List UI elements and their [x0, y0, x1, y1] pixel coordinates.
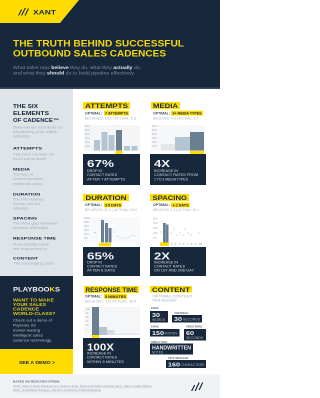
bar chart: media: 50%	[152, 133, 158, 136]
heading: MEDIA	[153, 103, 178, 110]
element: duration: The time between	[13, 197, 44, 201]
element: media	[13, 166, 43, 186]
stat box: 100X	[87, 342, 114, 354]
stat box	[150, 154, 206, 185]
bar chart: attempts: 10%	[85, 145, 91, 148]
footer	[0, 374, 220, 398]
bar chart: duration: 40%	[84, 229, 90, 232]
optimal value: OPTIMAL:	[153, 111, 170, 115]
bar chart: attempts: 30%	[85, 141, 91, 144]
button: see a demo: SEE A DEMO >	[19, 360, 55, 366]
box: direct mail handwritten notes	[150, 340, 193, 354]
bar chart: attempts: 80%	[85, 125, 91, 128]
optimal value	[85, 111, 129, 116]
bar chart: media: 40%	[152, 137, 158, 140]
header banner	[0, 0, 220, 89]
bar chart: spacing: 7	[187, 243, 189, 246]
bar chart: duration: 60%	[84, 225, 90, 228]
stat box: AFTER 8 DAYS	[87, 268, 116, 272]
optimal value: OPTIMAL:	[85, 111, 102, 115]
subtitle: What sales reps believe they do, what they actually do,	[13, 65, 141, 70]
bar chart: response time: 20	[86, 325, 89, 327]
sources	[13, 380, 153, 392]
element: attempts	[13, 146, 54, 161]
optimal value: 3-5 DAYS	[105, 203, 122, 207]
title: THE TRUTH BEHIND SUCCESSFUL	[13, 38, 185, 48]
stat box: 2X	[154, 250, 170, 262]
stat box	[83, 338, 140, 368]
stat box: INCREASE IN	[154, 260, 178, 264]
element: spacing	[13, 216, 57, 230]
sidebar heading	[13, 104, 59, 124]
box: text message 160 characters: TEXT MESSAGE	[168, 356, 189, 360]
stat box: INCREASE IN	[154, 169, 178, 173]
box: video email 60 seconds: VIDEO EMAIL	[186, 324, 203, 328]
box: video email 60 seconds	[184, 324, 206, 340]
promo text: Playbooks, the	[13, 322, 36, 328]
promo text: market-leading	[13, 328, 40, 332]
bar chart: media: 10%	[152, 145, 158, 148]
logo: XANT	[33, 10, 56, 17]
element: duration: DURATION	[13, 192, 40, 196]
sidebar intro	[13, 125, 64, 138]
sidebar intro: activities.	[13, 134, 32, 138]
panel: response time	[83, 286, 140, 368]
optimal value: 3+ MEDIA TYPES	[172, 112, 202, 116]
promo text: cadence technology.	[13, 338, 52, 342]
bar chart: spacing: 60%	[153, 222, 159, 225]
element: response time: RESPONSE TIME	[13, 236, 57, 240]
bar chart: response time: 40	[86, 321, 89, 323]
box: email 150 words	[150, 324, 180, 337]
element: content: The messaging used	[13, 262, 54, 266]
box: direct mail handwritten notes: NOTES	[152, 350, 163, 354]
bar chart: media	[151, 125, 205, 154]
box: video email 60 seconds: 60	[186, 331, 194, 337]
element: attempts: ATTEMPTS	[13, 146, 43, 150]
bar chart: spacing: 0%	[153, 237, 157, 240]
element: media: communication	[13, 177, 43, 181]
stat box: 67%	[87, 158, 115, 170]
bar chart: spacing: 8	[191, 243, 193, 246]
believed vs actual: BELIEVED: 24 | ACTUAL: 38.4	[85, 299, 136, 303]
promo text: intelligent sales	[13, 332, 43, 338]
optimal value	[153, 202, 190, 207]
promo text	[13, 318, 53, 342]
bar chart: duration: 0%	[84, 237, 88, 240]
playbooks logo: PLAYBOO KS	[13, 286, 60, 294]
box: direct mail handwritten notes: DIRECT MAIL	[151, 340, 168, 344]
box: email 30 words: EMAIL	[151, 306, 159, 310]
stat box: CONTACT RATES	[87, 173, 118, 177]
sidebar intro: structuring your sales	[13, 130, 57, 134]
bar chart: spacing: 9	[195, 243, 197, 246]
sidebar intro: Data-driven elements for	[13, 125, 64, 129]
element: spacing: The time gap between	[13, 222, 57, 226]
stat box: DROP IN	[87, 260, 102, 264]
box: text message 160 characters: 160	[168, 362, 180, 368]
title: OUTBOUND SALES CADENCES	[13, 48, 166, 58]
bar chart: spacing	[153, 218, 202, 246]
stat box: CONTACT RATES	[87, 356, 118, 360]
element: duration: the first and last	[13, 202, 41, 206]
stat box: CONTACT RATES	[87, 264, 118, 268]
bar chart: duration: 20%	[84, 233, 90, 236]
optimal value: OPTIMAL:	[153, 203, 170, 207]
box: email 30 words	[150, 306, 168, 322]
subtitle	[13, 65, 141, 76]
button: see a demo	[0, 349, 73, 374]
panel: media	[150, 102, 206, 185]
bar chart: duration: 100%	[84, 217, 91, 220]
heading: ATTEMPTS	[85, 103, 129, 110]
bar chart: spacing: 40%	[153, 227, 159, 230]
stat box: 4X	[154, 158, 170, 170]
bar chart: spacing: 20%	[153, 232, 159, 235]
box: email 30 words: WORDS	[152, 318, 165, 322]
bar chart: response time: 80	[86, 313, 89, 315]
bar chart: response time: 100	[86, 309, 91, 311]
bar chart: response time: 60	[86, 317, 89, 319]
element: content: CONTENT	[13, 256, 39, 260]
believed vs actual: BELIEVED: 15.1 | ACTUAL: 5.5	[85, 116, 136, 120]
bar chart: spacing: 10	[199, 243, 202, 246]
bar chart: media: 60%	[152, 129, 158, 132]
stat box: AFTER 7 ATTEMPTS	[87, 177, 126, 181]
promo heading: CADENCE	[13, 306, 39, 311]
promo heading: YOUR SALES	[13, 302, 46, 307]
element: duration	[13, 192, 44, 210]
heading: RESPONSE TIME	[86, 287, 138, 294]
box: email 150 words: WORDS	[164, 332, 178, 336]
optimal value: OPTIMAL:	[85, 203, 102, 207]
bar chart: attempts	[84, 125, 140, 154]
optimal value	[85, 294, 127, 299]
box: text message 160 characters: CHARACTERS	[180, 363, 204, 367]
panel: content	[150, 286, 206, 368]
bar chart: response time	[84, 307, 140, 338]
subheading	[152, 294, 193, 302]
bar chart: attempts: 50%	[85, 133, 91, 136]
optimal value: 5 MINUTES	[105, 295, 127, 299]
stat box: INCREASE IN	[87, 352, 111, 356]
bar chart: spacing: 80%	[153, 218, 159, 220]
sidebar heading: THE SIX	[13, 104, 39, 110]
optimal value: 1-2 DAYS	[172, 203, 189, 207]
element: media: MEDIA	[13, 166, 30, 172]
panel: playbooks promo	[0, 276, 73, 349]
promo heading: WORLD-CLASS?	[13, 311, 56, 316]
element: duration: attempt	[13, 206, 29, 210]
optimal value: OPTIMAL:	[85, 294, 102, 298]
believed vs actual: BELIEVED: 1.5 | ACTUAL: 10.4	[153, 208, 199, 212]
optimal value	[85, 202, 122, 207]
bar chart: duration: 80%	[84, 221, 90, 224]
promo heading: WANT TO MAKE	[13, 298, 54, 303]
icon: xant mark	[191, 382, 203, 391]
element: content	[13, 256, 54, 266]
bar chart: attempts: 60%	[85, 129, 91, 132]
box: voicemail 30 seconds: SECONDS	[183, 318, 200, 322]
stat box: 1 TO 3 MEDIA TYPES	[154, 177, 189, 181]
stat box: WITHIN 5 MINUTES	[87, 360, 125, 364]
stat box	[83, 154, 140, 185]
element: attempts: The total number of	[13, 152, 54, 156]
box: email 150 words: EMAIL	[151, 324, 159, 328]
box: direct mail handwritten notes: HANDWRITTEN	[152, 345, 191, 351]
bar chart: duration	[83, 217, 140, 246]
panel: duration	[83, 194, 140, 276]
element: media: The type of	[13, 172, 34, 176]
stat box: CONTACT RATES	[154, 264, 186, 268]
element: spacing: contact attempts	[13, 226, 48, 230]
panel: attempts	[83, 102, 140, 185]
heading: DURATION	[86, 195, 127, 202]
sidebar heading: OF CADENCE™	[13, 118, 59, 124]
stat box: DROP IN	[87, 169, 102, 173]
sources: XANT: State of Sales Development, Cadence Audit, Successful Sales Cadence report, State of Sales Metrics	[13, 384, 153, 388]
heading: CONTENT	[152, 287, 190, 294]
promo heading	[13, 298, 56, 316]
promo text: Check out a demo of	[13, 318, 53, 322]
sidebar heading: ELEMENTS	[13, 111, 50, 117]
subtitle: and what they should do to build pipeline effectively.	[13, 70, 135, 76]
logo	[18, 8, 56, 17]
sources: Other: Linked Best Practices, The Do's and Don'ts of SMS Marketing	[13, 388, 102, 392]
optimal value	[153, 111, 203, 116]
element: spacing: SPACING	[13, 216, 37, 220]
bar chart: spacing: 4	[175, 243, 177, 246]
optimal value: 7 ATTEMPTS	[105, 112, 129, 116]
bar chart: media: 80%	[152, 125, 158, 128]
subheading: PER MEDIUM	[152, 298, 176, 302]
box: text message 160 characters	[166, 356, 206, 368]
box: email 150 words: 150	[152, 331, 164, 337]
box: voicemail 30 seconds: 30	[174, 317, 182, 323]
element: media: methods used	[13, 182, 42, 186]
bar chart: spacing: 5	[179, 243, 181, 246]
box: video email 60 seconds: SECONDS	[186, 336, 203, 340]
title	[13, 38, 185, 58]
heading: SPACING	[152, 195, 187, 202]
sources: BASED ON RESEARCH FROM:	[13, 380, 60, 384]
element: response time: are responded to	[13, 247, 47, 251]
believed vs actual: BELIEVED: 20.1 | ACTUAL: 24.6	[85, 208, 137, 212]
panel: six elements sidebar	[0, 89, 73, 276]
bar chart: spacing: 3	[171, 243, 173, 246]
panel: spacing	[150, 194, 206, 276]
box: voicemail 30 seconds: VOICEMAIL	[174, 311, 189, 315]
box: voicemail 30 seconds	[172, 311, 202, 323]
stat box	[150, 247, 206, 276]
stat box: CONTACT RATES FROM	[154, 173, 198, 177]
believed vs actual: BELIEVED: 4.0 | ACTUAL: 2.0	[153, 116, 198, 120]
stat box: ON 1ST AND 2ND DAY	[154, 268, 195, 272]
stat box: 65%	[87, 250, 115, 262]
bar chart: attempts: 40%	[85, 137, 91, 140]
bar chart: media: 30%	[152, 141, 158, 144]
element: attempts: touch points made	[13, 157, 46, 161]
element: response time: How quickly leads	[13, 242, 49, 246]
element: response time	[13, 236, 57, 251]
box: email 30 words: 30	[152, 313, 160, 319]
bar chart: spacing: 6	[183, 243, 185, 246]
subheading: OPTIMAL CONTENT	[152, 294, 193, 298]
stat box	[83, 247, 140, 276]
